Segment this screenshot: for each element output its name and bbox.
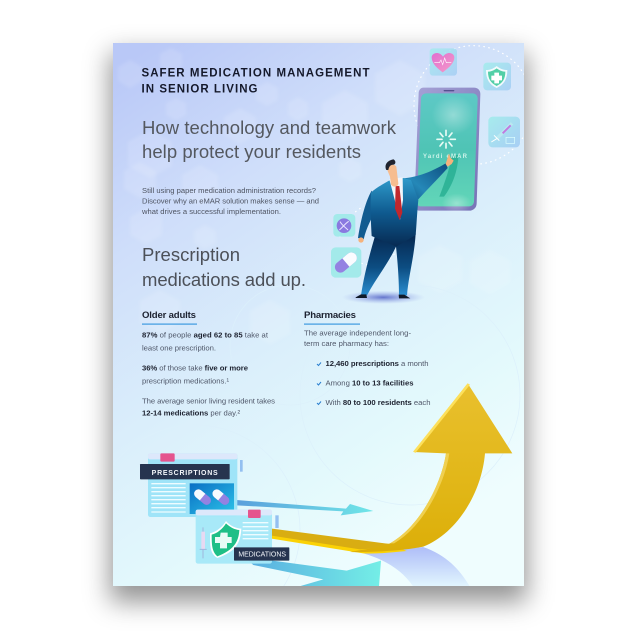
older adults heading: Older adults: [142, 310, 196, 321]
section heading: prescription medications add up: [142, 244, 306, 290]
neck and head: [387, 165, 398, 187]
small cyan arrow: [237, 500, 373, 515]
shirt: [389, 177, 403, 220]
panel: older adults: [142, 310, 275, 418]
older adults paragraph 2: 36% of those take five or more: [142, 364, 249, 372]
older adults paragraph 2: [142, 364, 249, 386]
page drop shadow: [113, 43, 524, 586]
older adults paragraph 3: The average senior living resident takes: [142, 396, 275, 406]
pharmacies intro: term care pharmacy has:: [304, 339, 389, 348]
older adults paragraph 2: prescription medications.¹: [142, 376, 229, 386]
raised arm: [403, 164, 448, 200]
pharmacies bullet list: Among 10 to 13 facilities: [326, 378, 414, 388]
section heading: prescription medications add up: Prescription: [142, 244, 240, 265]
pharmacies heading: Pharmacies: [304, 310, 356, 321]
older adults paragraph 1: 87% of people aged 62 to 85 take at: [142, 330, 269, 340]
green shield: [210, 521, 241, 558]
prescriptions label: PRESCRIPTIONS: [152, 470, 218, 477]
floor shadow: [346, 292, 420, 304]
icon: shield tile: [483, 63, 511, 90]
left arm: [358, 190, 372, 240]
intro paragraph: what drives a successful implementation.: [141, 207, 281, 216]
icon: heart tile: [430, 48, 457, 76]
intro paragraph: [141, 186, 319, 216]
older adults paragraph 1: [142, 330, 269, 352]
background hexagons: [121, 64, 156, 178]
medications label: MEDICATIONS: [238, 552, 286, 559]
phone label: Yardi eMAR: [423, 154, 468, 160]
icon: DNA tile: [333, 214, 355, 237]
tie: [395, 186, 402, 220]
illustration: phone, man and health icons: [331, 46, 533, 304]
older adults paragraph 3: 12-14 medications per day.²: [142, 408, 240, 418]
shoes: [356, 294, 410, 298]
syringe: [200, 527, 207, 558]
subtitle heading: [142, 117, 397, 162]
title: [142, 68, 370, 92]
man: [356, 153, 454, 298]
pharmacies bullet list: [317, 359, 430, 407]
dotted orbit ring: [340, 46, 533, 265]
hand right: [446, 153, 454, 167]
subtitle heading: How technology and teamwork: [142, 117, 397, 138]
pharmacies intro: The average independent long-: [304, 328, 411, 338]
phone: [414, 88, 480, 213]
pills box: [190, 483, 234, 514]
gold arrow: [270, 383, 512, 554]
intro paragraph: Still using paper medication administration records?: [142, 186, 316, 195]
large cyan arrow: [243, 557, 381, 587]
hand left: [358, 237, 364, 243]
section heading: prescription medications add up: medications add up.: [142, 269, 306, 290]
phone logo: [437, 130, 455, 148]
pharmacies bullet list: 12,460 prescriptions a month: [326, 359, 428, 368]
background arcs: [284, 341, 520, 586]
intro paragraph: Discover why an eMAR solution makes sense — and: [142, 196, 319, 206]
older adults paragraph 3: [142, 396, 275, 418]
illustration: growth arrows and record cards: [140, 383, 512, 587]
shadow beneath gold arrow: [363, 547, 470, 587]
hair: [386, 159, 395, 170]
infographic page: [113, 43, 524, 586]
pharmacies intro: [304, 330, 411, 348]
icon: capsule tile: [331, 247, 361, 278]
icon: syringe tile: [488, 117, 520, 147]
legs: [361, 233, 416, 295]
card: medications: [196, 510, 289, 564]
torso: [371, 178, 418, 247]
panel: pharmacies: [304, 310, 430, 407]
pharmacies bullet list: With 80 to 100 residents each: [326, 398, 430, 407]
older adults paragraph 1: least one prescription.: [142, 344, 216, 352]
page background: [113, 43, 524, 586]
title: IN SENIOR LIVING: [142, 84, 258, 96]
title: SAFER MEDICATION MANAGEMENT: [142, 68, 370, 80]
subtitle heading: help protect your residents: [142, 141, 361, 162]
card: prescriptions: [140, 453, 243, 517]
